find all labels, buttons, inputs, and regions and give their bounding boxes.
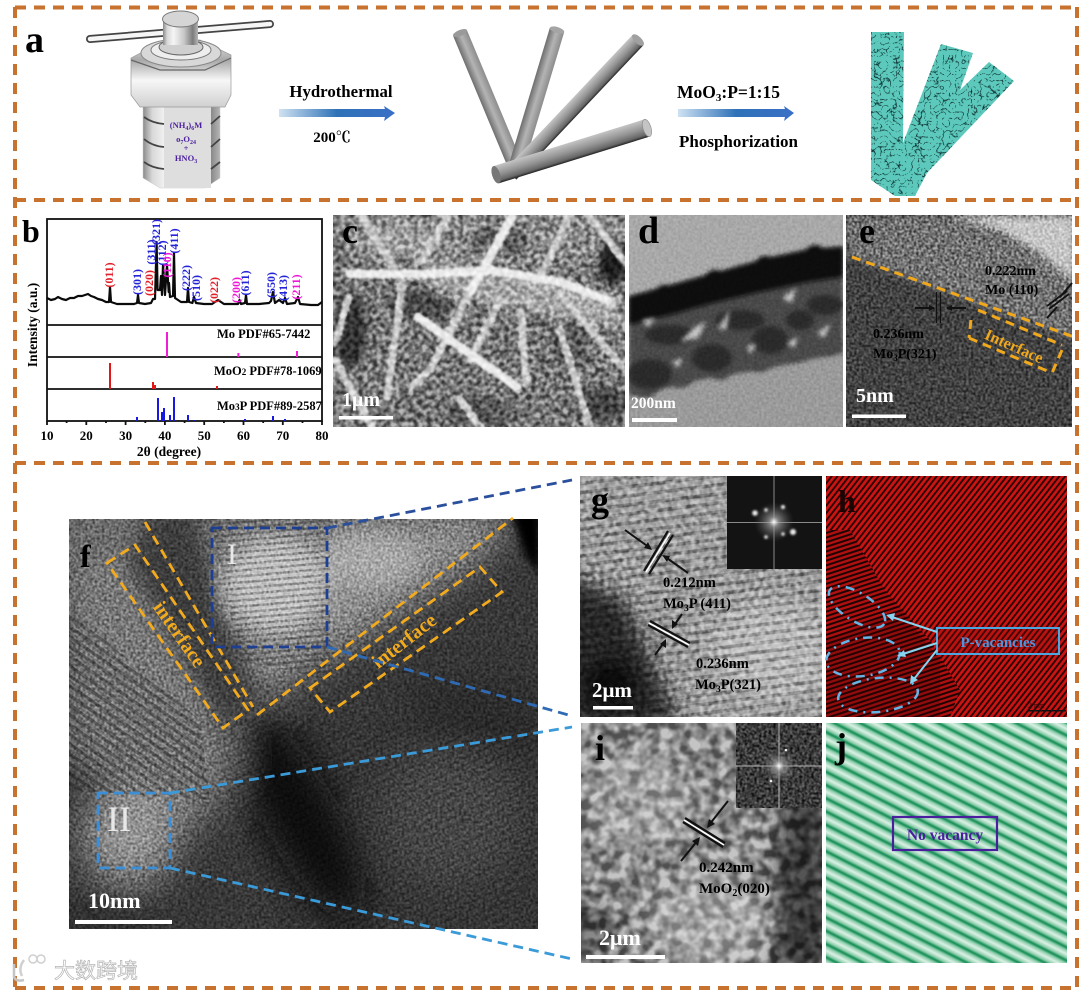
peak labels: (413) [276, 275, 290, 301]
panel j: inverse FFT no vacancy [826, 723, 1067, 963]
label h: h [838, 483, 856, 519]
peak labels: (321) [149, 219, 163, 245]
peak labels: (411) [167, 228, 181, 254]
peak labels: (211) [289, 274, 303, 300]
scale text i: 2μm [599, 925, 641, 950]
panel c: SEM image [333, 211, 626, 427]
scale bar d [632, 418, 677, 422]
x axis tick labels: 70 [276, 428, 289, 443]
x axis tick labels: 20 [80, 428, 93, 443]
reagent label: ) [188, 120, 191, 130]
peak labels: (022) [207, 277, 221, 303]
lattice spacing annotations e [873, 264, 1072, 363]
inset: FFT g [727, 476, 822, 569]
callout: no vacancy: No vacancy [907, 827, 983, 844]
icon: porous teal nanorods [871, 32, 1014, 196]
peak labels: (110) [160, 252, 174, 278]
interface text left: interface [148, 597, 210, 672]
reagent label: 3 [194, 159, 197, 165]
reference sticks: Mo [167, 332, 297, 357]
inset: FFT i [736, 723, 822, 808]
region I label: I [227, 538, 237, 571]
lattice spacing annotations g: P (411) [689, 596, 731, 612]
arrow label: phosphorization: Phosphorization [679, 132, 799, 151]
reagent label: o [176, 134, 180, 144]
lattice spacing annotations g: P(321) [721, 677, 761, 693]
interface dashed outline [852, 257, 1074, 373]
reference sticks: MoO2 [110, 363, 217, 389]
reagent label: HNO [175, 153, 194, 163]
peak labels: (510) [189, 275, 203, 301]
label g: g [591, 480, 609, 520]
lattice spacing annotations e: 0.236nm [873, 327, 924, 342]
arrow label: ratio: 3 [716, 92, 722, 104]
x axis tick labels: 10 [40, 428, 54, 443]
scale text c: 1μm [342, 389, 380, 411]
peak labels: (222) [179, 265, 193, 291]
y axis title: Intensity (a.u.) [25, 283, 40, 367]
peak labels: (311) [144, 239, 158, 265]
arrow label: ratio: MoO [677, 82, 716, 102]
scale mark h [1027, 701, 1066, 712]
panel g: lattice image region I [560, 476, 830, 730]
label e: e [859, 211, 875, 251]
reagent label: + [184, 143, 189, 153]
chart frame [47, 219, 322, 425]
label i: i [595, 728, 605, 768]
lattice spacing annotations g: 3 [716, 685, 721, 695]
x axis tick labels [40, 428, 328, 443]
vacancy outlines [822, 578, 920, 716]
peak labels [102, 219, 303, 303]
reagent label: 7 [180, 140, 183, 146]
x axis tick labels: 40 [158, 428, 171, 443]
callout: P-vacancies: P-vacancies [961, 635, 1036, 651]
watermark logo and name [14, 955, 138, 983]
x axis title: 2θ (degree) [137, 444, 201, 459]
reference labels: Mo3P PDF#89-2587 [217, 399, 322, 413]
reagent label: M [194, 120, 202, 130]
panel h: inverse FFT with P vacancies [822, 476, 1067, 717]
lattice spacing annotations e: Mo [873, 347, 893, 362]
region II label: II [107, 799, 131, 839]
scale bar f [75, 920, 172, 924]
arrow label: hydrothermal: Hydrothermal [289, 82, 393, 101]
panel f: HRTEM overview [30, 480, 572, 959]
reference labels: Mo PDF#65-7442 [217, 327, 310, 341]
label j: j [834, 726, 847, 766]
arrow: phosphorization [678, 106, 794, 121]
scale text g: 2μm [592, 678, 632, 702]
lattice spacing annotations g: 0.236nm [696, 656, 749, 672]
lattice spacing annotations g: 3 [684, 604, 689, 614]
peak labels: (020) [142, 270, 156, 296]
interface outlines f [107, 518, 513, 728]
label f: f [80, 538, 91, 574]
scale mark h: 2 nm [1028, 701, 1045, 710]
label a: a [25, 19, 44, 61]
measured XRD trace [47, 242, 322, 305]
scale text e: 5nm [856, 385, 894, 407]
arrow: hydrothermal [279, 106, 395, 121]
peak labels: (112) [155, 240, 169, 266]
x axis tick labels: 30 [119, 428, 132, 443]
lattice spacing annotations g: 0.212nm [663, 575, 716, 591]
panel a: synthesis scheme [25, 11, 1020, 200]
panel d: TEM image [628, 210, 843, 427]
reference sticks: Mo3P [137, 397, 285, 421]
scale text f: 10nm [88, 888, 141, 913]
lattice spacing annotation i: (020) [737, 881, 770, 897]
lattice spacing annotation i [681, 801, 770, 899]
lattice spacing annotation i: 0.242nm [699, 860, 754, 876]
arrow label: 200 C: 200℃ [313, 130, 351, 146]
lattice spacing annotations e: P(321) [898, 347, 937, 362]
region box II with zoom lines [98, 727, 572, 959]
label b: b [22, 213, 40, 249]
icon: hydrothermal autoclave [90, 11, 270, 188]
lattice spacing annotation i: MoO [699, 881, 732, 897]
scale bar g [593, 706, 633, 710]
callout: no vacancy [893, 817, 997, 850]
reagent label: (NH [170, 120, 185, 130]
peak labels: (200) [229, 277, 243, 303]
watermark logo and name: 大数跨境 [54, 960, 138, 983]
reagent label: 6 [191, 126, 194, 132]
region box I with zoom lines [212, 480, 572, 716]
panel e: HRTEM with interface [846, 211, 1075, 427]
reagent label: 24 [190, 140, 196, 146]
interface text right: interface [368, 609, 441, 673]
lattice spacing annotation i: 2 [732, 888, 737, 899]
peak labels: (301) [130, 269, 144, 295]
lattice spacing annotations g: Mo [663, 596, 684, 612]
label c: c [342, 211, 358, 251]
icon: grey nanorods [452, 25, 653, 185]
peak labels: (611) [238, 270, 252, 296]
panel b: XRD chart [22, 213, 328, 459]
peak labels: (011) [102, 262, 116, 288]
lattice spacing annotations e: Mo (110) [985, 283, 1039, 298]
peak labels: (550) [264, 272, 278, 298]
reagent label [170, 120, 202, 165]
x axis tick labels: 60 [237, 428, 250, 443]
lattice spacing annotations g [625, 530, 761, 695]
callout: P-vacancies [886, 613, 1059, 684]
lattice spacing annotations e: 0.222nm [985, 264, 1036, 279]
x axis tick labels: 50 [198, 428, 211, 443]
reference labels: MoO2 PDF#78-1069 [214, 364, 322, 378]
arrow label: ratio: :P=1:15 [721, 82, 780, 102]
scale bar c [339, 416, 393, 420]
lattice spacing annotations g: Mo [695, 677, 716, 693]
scale bar e [852, 414, 906, 418]
label d: d [638, 210, 659, 252]
scale bar i [586, 955, 665, 959]
reagent label: 4 [185, 126, 188, 132]
x axis tick labels: 80 [316, 428, 328, 443]
panel i: lattice image region II [560, 723, 830, 970]
lattice spacing annotations e: 3 [893, 353, 898, 363]
reagent label: O [183, 134, 190, 144]
reference labels [214, 327, 322, 413]
scale text d: 200nm [631, 395, 676, 412]
interface text e: Interface [982, 326, 1046, 367]
